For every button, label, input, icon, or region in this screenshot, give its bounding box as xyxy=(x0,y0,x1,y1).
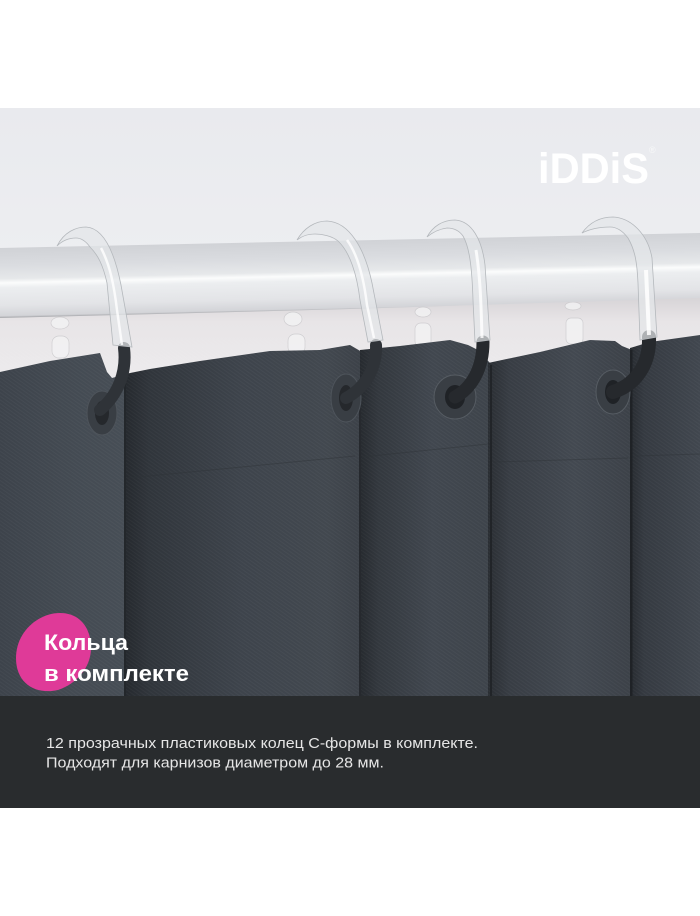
heading xyxy=(46,634,188,681)
logo: IDDIS: iDDiS xyxy=(538,145,649,193)
ring 3 xyxy=(427,220,490,397)
wall above the rod xyxy=(0,108,700,258)
heading: в комплекте xyxy=(44,661,189,686)
logo: IDDIS: ® xyxy=(649,145,656,155)
ring 4 xyxy=(582,217,657,392)
curtain hooks behind xyxy=(51,302,583,358)
dark caption band xyxy=(0,696,700,808)
ring 2 xyxy=(297,221,383,398)
photo: curtain on rod with rings xyxy=(0,108,700,696)
curtain rod xyxy=(0,233,700,318)
wall below the rod xyxy=(0,298,700,378)
caption text xyxy=(46,735,478,772)
ring 1 xyxy=(57,227,132,410)
pink blob accent xyxy=(16,613,91,691)
grommets xyxy=(87,370,630,435)
caption text: Подходят для карнизов диаметром до 28 мм. xyxy=(46,754,384,772)
caption text: 12 прозрачных пластиковых колец С-формы в комплекте. xyxy=(46,735,478,752)
heading: Кольца xyxy=(44,630,129,655)
curtain panels xyxy=(0,335,700,696)
